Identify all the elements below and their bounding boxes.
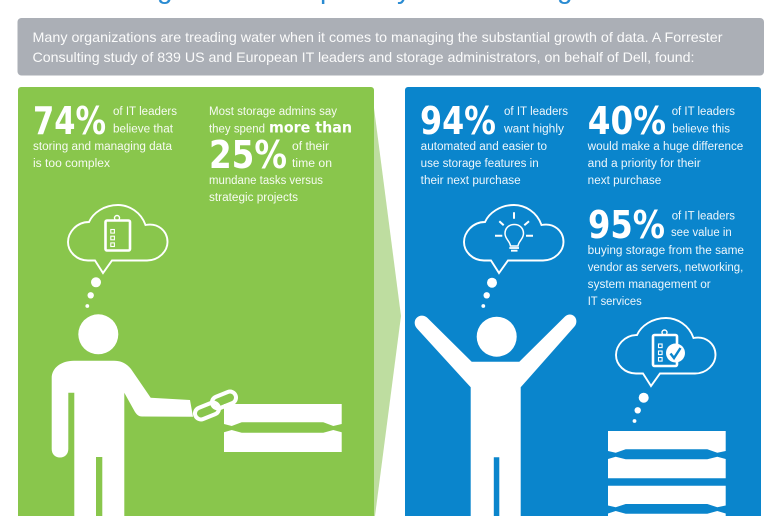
stat: 25% bbox=[209, 106, 352, 204]
stat: 25%: of their bbox=[292, 141, 329, 153]
stat: 40% bbox=[587, 99, 743, 187]
stat: 40%: and a priority for their bbox=[588, 158, 701, 170]
stat: 95%: system management or bbox=[588, 279, 711, 291]
stat: 25%: Most storage admins say bbox=[209, 106, 337, 118]
stat: 95%: of IT leaders bbox=[672, 210, 735, 222]
stat: 25%: mundane tasks versus bbox=[209, 175, 323, 187]
title (cropped at top edge) bbox=[157, 0, 573, 4]
panel: intro text bbox=[18, 18, 764, 76]
stat: 40%: would make a huge difference bbox=[587, 141, 743, 153]
icon: two storage units bbox=[224, 404, 342, 452]
stat: 40%: of IT leaders bbox=[672, 106, 735, 118]
stat: 40%: next purchase bbox=[588, 175, 661, 187]
icon: thought cloud with light bulb bbox=[464, 205, 564, 308]
panel: blue, what leaders want bbox=[405, 87, 761, 516]
stat: 95%: vendor as servers, networking, bbox=[588, 262, 743, 274]
stat: 94%: automated and easier to bbox=[421, 141, 547, 153]
stat: 94%: use storage features in bbox=[421, 158, 539, 170]
stat: 94%: of IT leaders bbox=[504, 106, 568, 118]
stat: 25%: 25% bbox=[209, 133, 287, 178]
stat: 25%: more than bbox=[269, 119, 352, 137]
stat: 40%: 40% bbox=[588, 99, 666, 144]
icon: happy person with raised arms bbox=[415, 315, 576, 516]
stat: 94%: want highly bbox=[503, 124, 564, 136]
icon: thought cloud with clipboard bbox=[68, 205, 168, 308]
stat: 25%: strategic projects bbox=[209, 192, 298, 204]
stat: 95% bbox=[588, 203, 744, 308]
stat: 94%: their next purchase bbox=[421, 175, 521, 187]
panel: green, complexity bbox=[18, 87, 374, 516]
stat: 74%: is too complex bbox=[33, 158, 110, 170]
stat: 25%: they spend bbox=[209, 124, 265, 136]
stat: 74% bbox=[33, 99, 177, 170]
icon: chain links bbox=[193, 390, 238, 421]
stat: 74%: storing and managing data bbox=[33, 141, 173, 153]
icon: stack of storage units bbox=[608, 431, 726, 516]
stat: 95%: 95% bbox=[588, 203, 665, 248]
stat: 74%: believe that bbox=[113, 124, 174, 136]
icon: person chained to storage bbox=[52, 314, 342, 516]
icon: thought cloud with checked clipboard bbox=[616, 318, 716, 423]
stat: 74%: of IT leaders bbox=[113, 106, 177, 118]
stat: 95%: see value in bbox=[671, 227, 732, 239]
arrow between panels bbox=[370, 108, 401, 516]
panel: intro text: Consulting study of 839 US and European IT leaders and storage administrators, on behalf of Dell, found: bbox=[32, 49, 694, 65]
stat: 95%: IT services bbox=[588, 296, 642, 308]
panel: intro text: Many organizations are treading water when it comes to managing the substantial growth of data. A Forrester bbox=[32, 29, 723, 45]
stat: 40%: believe this bbox=[672, 124, 730, 136]
stat: 95%: buying storage from the same bbox=[588, 245, 744, 257]
stat: 94% bbox=[420, 99, 568, 187]
stat: 25%: time on bbox=[292, 158, 332, 170]
stat: 74%: 74% bbox=[33, 99, 106, 144]
stat: 94%: 94% bbox=[420, 99, 496, 144]
